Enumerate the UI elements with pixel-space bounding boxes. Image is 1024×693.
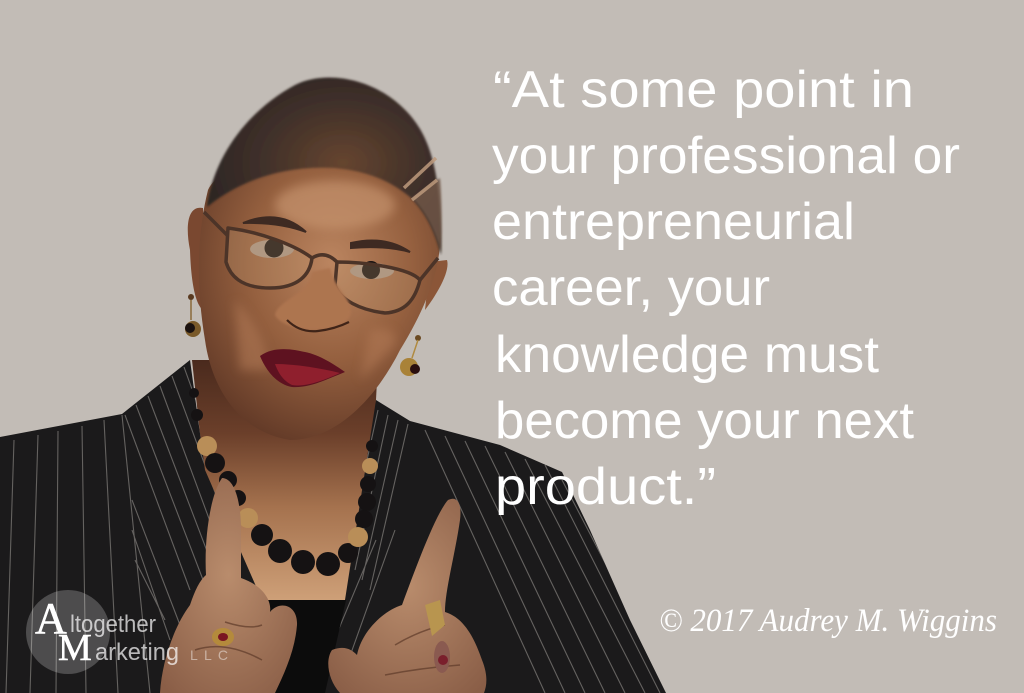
quote text — [492, 61, 960, 516]
quote text: product.” — [495, 458, 716, 516]
cheek highlights — [235, 300, 396, 380]
right ear — [425, 260, 448, 310]
quote text: become your next — [495, 392, 915, 450]
copyright signature: © 2017 Audrey M. Wiggins — [659, 603, 997, 639]
rings — [425, 600, 450, 673]
left ear — [188, 208, 207, 312]
quote text: “At some point in — [493, 61, 914, 119]
forehead highlight — [275, 181, 395, 229]
eyebrows — [243, 217, 410, 252]
left hand with raised index finger — [160, 478, 297, 693]
face — [199, 154, 440, 440]
eyes — [250, 238, 394, 279]
logo: Altogether Marketing LLC: LLC — [190, 647, 228, 663]
black shirt — [268, 600, 346, 693]
glasses — [204, 212, 438, 313]
quote text: career, your — [492, 259, 770, 317]
quote text: knowledge must — [495, 326, 880, 384]
hair parting lines — [404, 158, 437, 200]
right earring — [400, 335, 421, 376]
ring — [212, 628, 234, 646]
logo: Altogether Marketing LLC — [26, 590, 228, 674]
logo: Altogether Marketing LLC: arketing — [95, 639, 179, 666]
left earring — [185, 294, 201, 337]
logo: Altogether Marketing LLC: A — [35, 594, 67, 643]
quote text: your professional or — [492, 127, 960, 185]
logo: Altogether Marketing LLC: ltogether — [70, 611, 156, 638]
jacket — [0, 360, 666, 693]
hair — [207, 78, 441, 255]
nose — [275, 268, 351, 330]
portrait: woman pointing upward — [0, 78, 666, 693]
logo: Altogether Marketing LLC: M — [58, 627, 92, 669]
necklace — [189, 388, 378, 576]
neck and chest skin — [192, 360, 378, 605]
right hand with raised index finger — [328, 499, 486, 693]
temple hair — [412, 178, 442, 254]
quote text: entrepreneurial — [492, 193, 855, 251]
lips — [260, 349, 345, 387]
